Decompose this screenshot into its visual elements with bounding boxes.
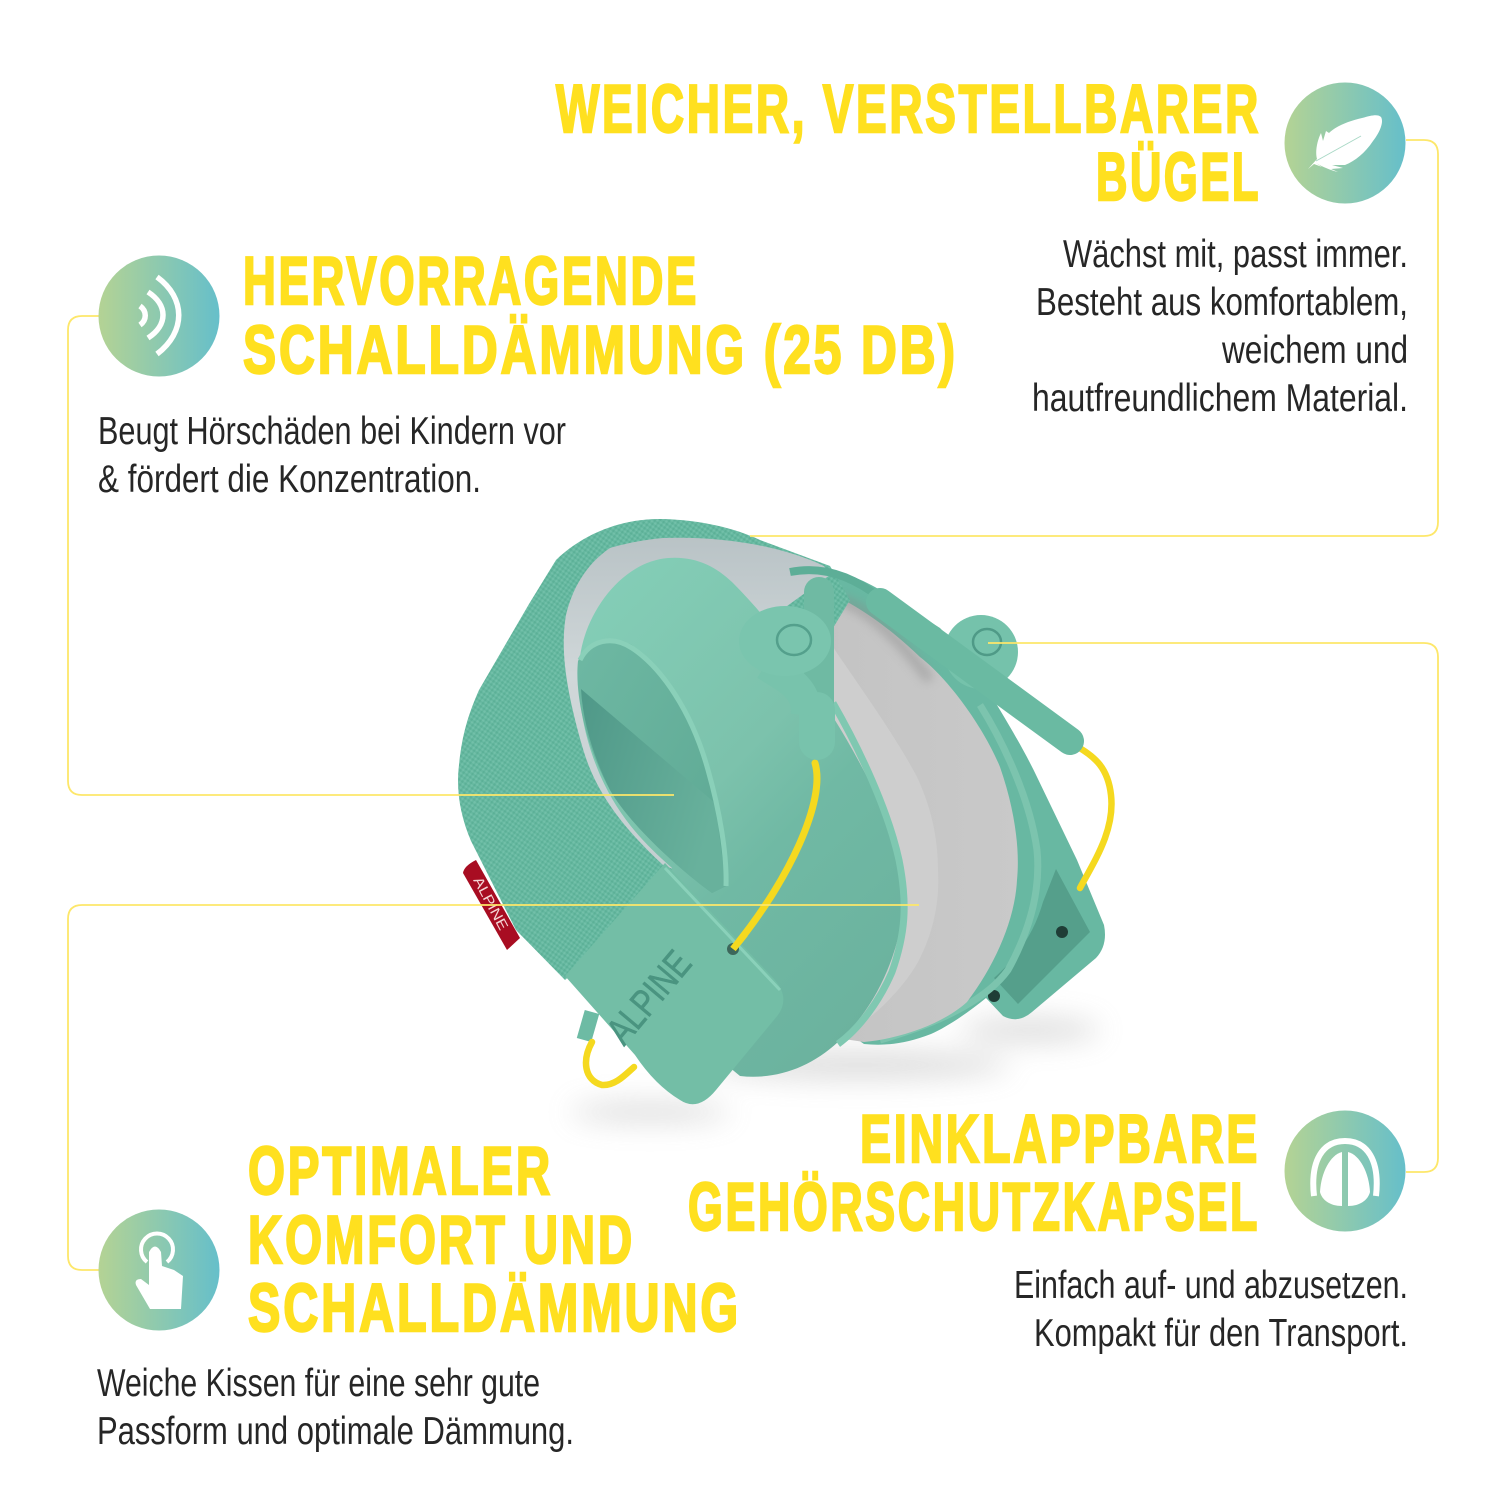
heading: Optimaler Komfort: OPTIMALER [248, 1133, 553, 1209]
back slider knob [790, 570, 1070, 741]
heading: Hervorragende Schalldämmung: SCHALLDÄMMUNG (25 DB) [243, 312, 958, 388]
text: Wächst mit: hautfreundlichem Material. [1032, 377, 1408, 420]
heading: Weicher, verstellbarer Bügel [556, 71, 1261, 215]
red tag [463, 860, 520, 950]
heading: Hervorragende Schalldämmung: HERVORRAGENDE [243, 243, 699, 319]
icon: folded ear muffs [1284, 1110, 1406, 1232]
text: Wächst mit: Wächst mit, passt immer. [1063, 233, 1408, 276]
front slider knob [739, 592, 831, 742]
text: Beugt Hörschäden: & fördert die Konzentration. [98, 458, 481, 501]
grey inner band [564, 538, 830, 880]
leader line: sound insulation [68, 316, 674, 795]
recessed panel [577, 639, 726, 893]
text: Einfach auf- und abzusetzen: Kompakt für den Transport. [1034, 1312, 1408, 1355]
heading: Optimaler Komfort [248, 1133, 741, 1346]
text: Weiche Kissen: Weiche Kissen für eine sehr gute [97, 1362, 540, 1405]
text: Beugt Hörschäden [98, 410, 566, 501]
red tag: ALPINE [470, 874, 512, 933]
text: Weiche Kissen: Passform und optimale Dämmung. [97, 1410, 574, 1453]
leader line: foldable cup [988, 643, 1438, 1172]
ALPINE plate with logo [565, 863, 783, 1104]
heading: Optimaler Komfort: SCHALLDÄMMUNG [248, 1270, 741, 1346]
text: Weiche Kissen [97, 1362, 574, 1453]
front ear cup shell [579, 558, 904, 1077]
text: Einfach auf- und abzusetzen [1014, 1264, 1408, 1355]
heading: Weicher, verstellbarer Bügel: BÜGEL [1096, 139, 1261, 215]
text: Wächst mit: weichem und [1221, 329, 1408, 372]
grey cushions [744, 577, 1018, 1042]
icon: feather [1284, 82, 1406, 204]
icon: sound waves [98, 256, 220, 376]
headband fabric [458, 519, 850, 980]
heading: Einklappbare Gehörschutzkapsel [688, 1101, 1260, 1245]
small back hanger and wire [584, 1012, 634, 1085]
ALPINE plate with logo: ALPINE [599, 943, 700, 1053]
heading: Optimaler Komfort: KOMFORT UND [248, 1202, 635, 1278]
icon: tapping hand [98, 1210, 220, 1330]
heading: Einklappbare Gehörschutzkapsel: EINKLAPPBARE [860, 1101, 1260, 1177]
shadow [570, 1018, 1100, 1122]
back yellow wire [1078, 747, 1112, 888]
heading: Hervorragende Schalldämmung [243, 243, 958, 388]
front yellow wire [732, 763, 817, 950]
leader line: headband [750, 140, 1438, 536]
text: Beugt Hörschäden: Beugt Hörschäden bei Kindern vor [98, 410, 566, 453]
leader line: cushion [68, 905, 919, 1270]
back ear cup shell [788, 568, 1105, 1045]
text: Wächst mit: Besteht aus komfortablem, [1036, 281, 1408, 324]
text: Wächst mit [1032, 233, 1408, 420]
product: foldable ear defenders [458, 519, 1112, 1122]
